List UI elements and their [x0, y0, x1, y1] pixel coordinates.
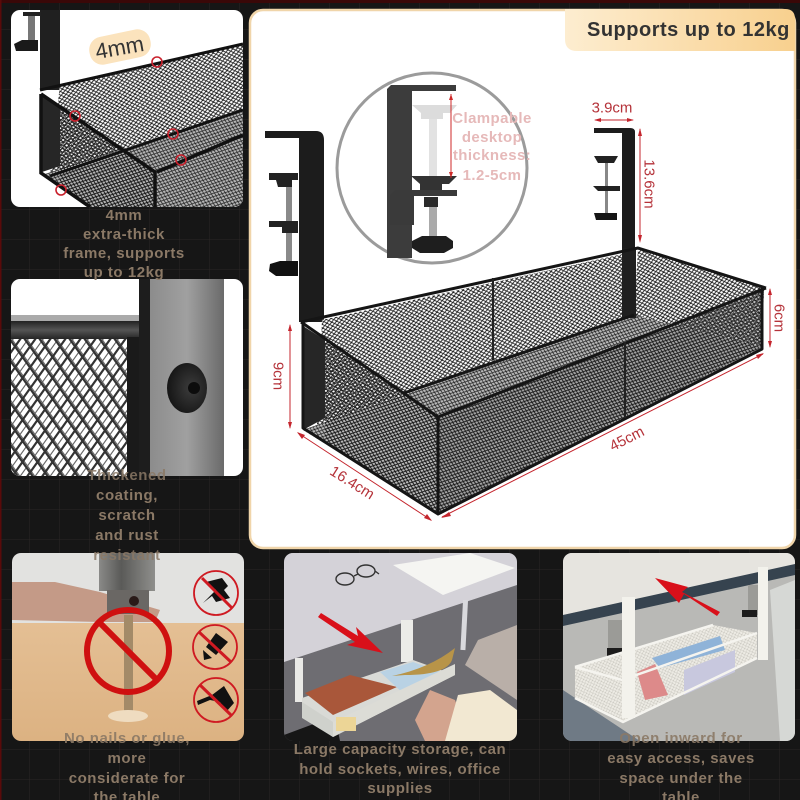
caption: frame: 4mm — [106, 207, 142, 224]
arrow: red pointer — [655, 578, 720, 616]
caption: clampable desktop thickness: desktop — [462, 129, 522, 146]
caption: coating: resistant — [93, 547, 161, 564]
glasses — [336, 565, 379, 585]
drill chuck and bit — [99, 553, 155, 722]
caption: clampable desktop thickness — [452, 110, 532, 184]
caption: open inward: space under the — [619, 770, 743, 787]
seated person — [415, 625, 517, 741]
caption: coating: scratch — [98, 507, 156, 524]
caption: frame: frame, supports — [63, 245, 185, 262]
left clamp — [265, 131, 324, 322]
panel: open inward — [563, 553, 795, 741]
caption: coating — [87, 467, 167, 564]
panel: coating close-up — [11, 279, 243, 476]
panel: no drilling — [12, 553, 244, 741]
caption: open inward: Open inward for — [619, 730, 743, 747]
icon: clamp and post — [14, 10, 60, 90]
caption: no nails: more — [108, 750, 146, 767]
hand — [12, 582, 160, 622]
right clamp — [593, 128, 635, 250]
panel: large capacity storage — [284, 553, 517, 741]
detail circle: clampable thickness — [337, 73, 527, 263]
caption: frame: up to 12kg — [84, 264, 164, 281]
caption: coating: and rust — [95, 527, 159, 544]
basket mesh close-up — [40, 44, 243, 207]
dimension labels: 16.4cm — [327, 463, 377, 503]
dimension labels — [270, 100, 788, 503]
icon: no pins — [194, 571, 238, 615]
badge: supports up to 12kg: Supports up to 12kg — [587, 19, 790, 41]
desk surface — [284, 553, 517, 662]
caption: frame: extra-thick — [83, 226, 165, 243]
clamps — [607, 585, 758, 656]
post with screw — [139, 279, 224, 476]
caption: no nails: No nails or glue, — [64, 730, 190, 747]
icon: large prohibition sign — [87, 610, 169, 692]
callout: 4mm label: 4mm — [93, 31, 146, 64]
caption: clampable desktop thickness: Clampable — [452, 110, 532, 127]
caption: coating: coating, — [96, 487, 158, 504]
dimension labels: 6cm — [770, 304, 788, 332]
red thickness markers — [56, 57, 186, 195]
caption: clampable desktop thickness: thickness: — [453, 147, 531, 164]
caption: frame — [63, 207, 185, 281]
dimension annotations — [288, 118, 772, 521]
desk organiser basket — [295, 620, 455, 737]
table top — [563, 553, 795, 615]
caption: large capacity: hold sockets, wires, office — [299, 761, 501, 778]
panel: 4mm frame close-up — [11, 10, 243, 207]
mesh detail — [11, 315, 139, 476]
caption: large capacity — [294, 741, 506, 797]
caption: no nails: considerate for — [69, 770, 185, 787]
dimension labels: 13.6cm — [640, 159, 658, 209]
icon: no power drill — [194, 678, 238, 722]
caption: large capacity: Large capacity storage, can — [294, 741, 506, 758]
caption: open inward: easy access, saves — [607, 750, 755, 767]
panel: main product — [250, 9, 795, 548]
caption: clampable desktop thickness: 1.2-5cm — [463, 167, 521, 184]
white mesh basket — [575, 567, 768, 722]
icon: no glue — [193, 625, 237, 669]
dimension labels: 9cm — [270, 362, 286, 390]
caption: coating: Thickened — [87, 467, 167, 484]
caption: large capacity: supplies — [367, 780, 433, 797]
basket: wire mesh — [301, 248, 766, 514]
dimension labels: 45cm — [607, 423, 647, 455]
badge: supports up to 12kg — [565, 9, 795, 51]
arrow: red pointer — [318, 613, 383, 653]
dimension labels: 3.9cm — [592, 100, 632, 116]
caption: open inward — [607, 730, 755, 800]
carpet and floor — [563, 690, 640, 741]
caption: no nails — [64, 730, 190, 800]
